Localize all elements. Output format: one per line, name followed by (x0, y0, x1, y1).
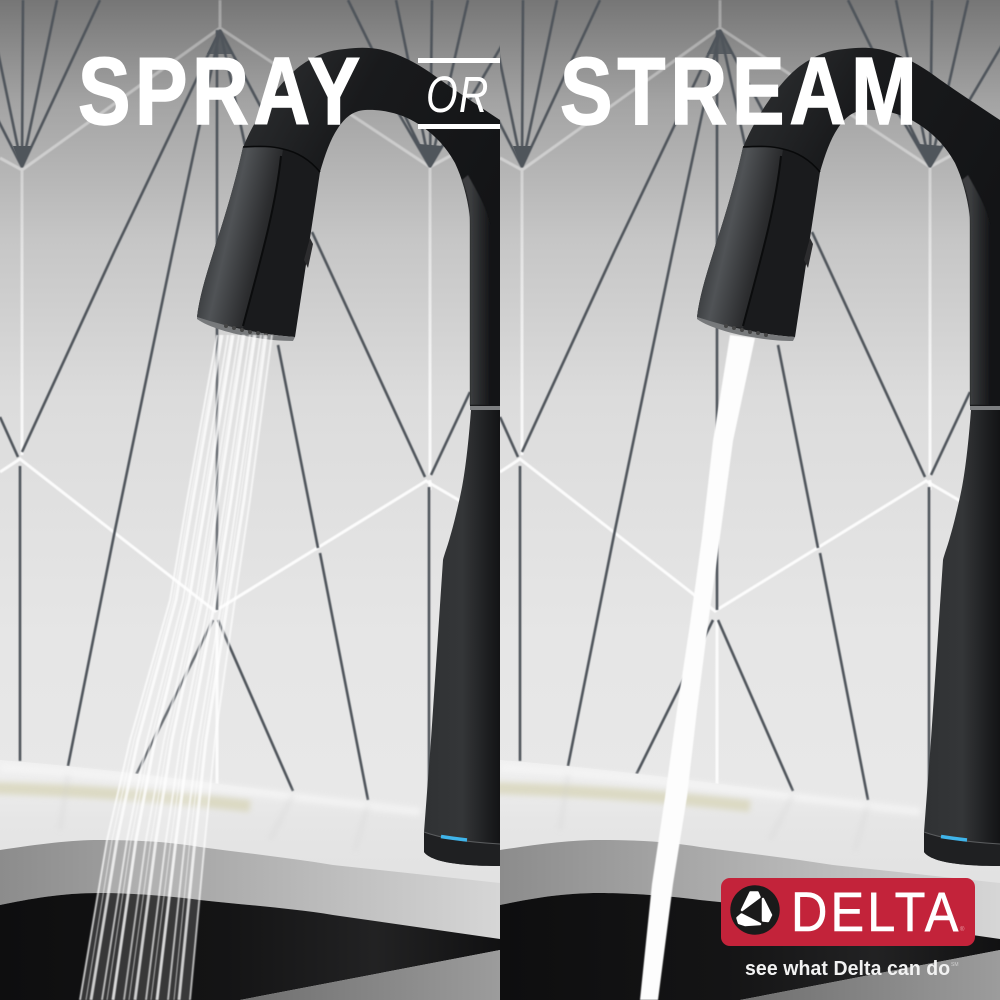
logo wordmark: DELTA (791, 882, 959, 944)
panel: spray photo (0, 0, 505, 1000)
service mark: SM (951, 962, 958, 968)
title: SPRAY: SPRAY (78, 38, 360, 145)
title: OR with rules: OR (426, 66, 488, 123)
tagline: see what Delta can do (745, 958, 950, 980)
icon: Delta emblem (730, 885, 780, 935)
registered mark: ® (960, 926, 965, 933)
spray of water strands (80, 335, 272, 1000)
title: STREAM: STREAM (560, 38, 917, 145)
title: OR with rules (418, 58, 500, 129)
solid stream of water (640, 335, 755, 1000)
panel: stream photo (490, 0, 1000, 1000)
logo: Delta (721, 878, 975, 980)
